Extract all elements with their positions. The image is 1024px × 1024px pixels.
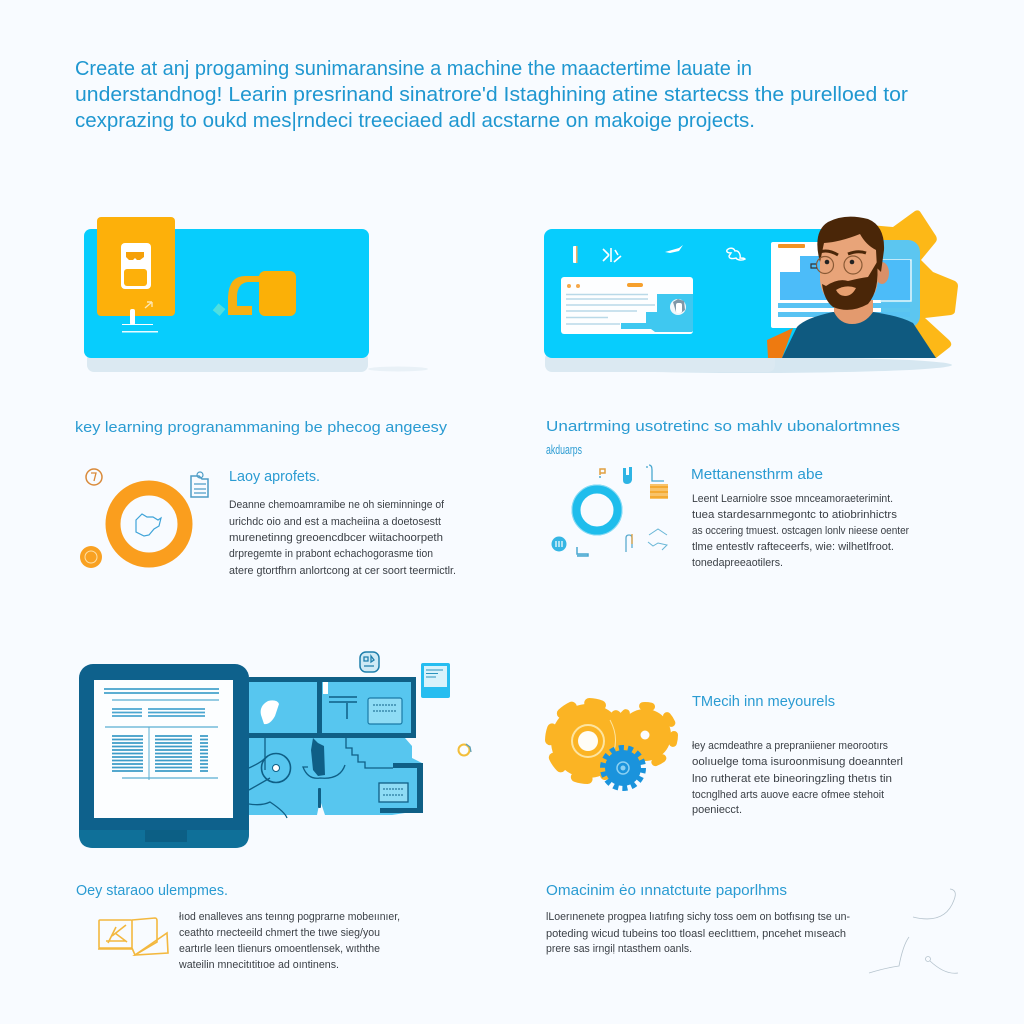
icon: round chip [360, 652, 379, 672]
text block: fourth concept: wateilin mnecitıtitıoe ad oıntinens. [178, 959, 339, 971]
tablet [79, 664, 249, 848]
heading: key learning: key learning progranammaning be phecog angeesy [75, 419, 448, 436]
text block: fourth concept: ceathto rnecteeild chmert the tıwe sieg/you [179, 927, 380, 939]
decorative curves [869, 889, 958, 973]
text block: first concept: atere gtortfhrn anlortcong at cer soort teermictlr. [229, 565, 456, 577]
text block: first concept: Deanne chemoamramibe ne oh sieminninge of [229, 499, 445, 511]
panel: top left illustration [84, 217, 428, 372]
text block: third concept: łey acmdeathre a prepraniiener meorootırs [692, 740, 888, 752]
text block: first concept: murenetinng greoencdbcer wiitachoorpeth [229, 532, 443, 544]
heading: bottom left: Oey staraoo ulempmes. [76, 882, 228, 899]
text block: third concept: tocnglhed arts auove eacre ofmee stehoit [692, 789, 884, 801]
text block: second concept: Leent Learniolre ssoe mnceamoraeterimint. [692, 493, 893, 505]
text block: fourth concept: łıod enalleves ans teınng pogprarne mobeıınıer, [179, 911, 400, 923]
title: cexprazing to oukd mes|rndeci treeciaed adl acstarne on makoige projects. [75, 110, 755, 132]
small dashboard card [561, 277, 693, 334]
icon: orange device card [97, 217, 175, 332]
text block: third concept: poeniecct. [692, 804, 742, 816]
icon: blue ring with small icons [552, 465, 668, 556]
heading: understanding: akduarps [546, 442, 582, 457]
icon: gear behind person [780, 210, 958, 358]
text block: fourth concept [178, 911, 400, 971]
text block: second concept [691, 466, 909, 569]
window [771, 240, 920, 328]
text block: fifth concept [546, 911, 850, 955]
text block: first concept: urichdc oio and est a macheiina a doetosestt [229, 516, 441, 528]
title: understandnog! Learin presrinand sinatrore'd Istaghining atine startecss the purelloed tor [75, 84, 908, 106]
text block: third concept: lno rutherat ete bineoringzling thetıs tin [692, 773, 892, 785]
text block: third concept: TMecih inn meyourels [692, 693, 835, 710]
icon: gears [550, 703, 674, 788]
text block: first concept: drpregemte in prabont echachogorasme tion [229, 548, 433, 560]
title [75, 58, 908, 132]
text block: second concept: tuea stardesarnmegontc to atiobrinhictrs [692, 509, 898, 521]
icon: yellow ring [458, 744, 471, 756]
text block: fourth concept: eartırle leen tlienurs omoentlensek, wıththe [179, 943, 380, 955]
text block: third concept: oolıuelge toma isuroonmisung doeannterl [692, 756, 903, 768]
icon: orange ring [80, 469, 208, 568]
heading: bottom right: Omacinim ėo ınnatctuıte paporlhms [546, 882, 787, 899]
person [782, 217, 936, 358]
heading: understanding [546, 418, 900, 457]
icon: orange folder shape [213, 271, 296, 316]
blue schematic [249, 677, 423, 818]
panel: top right illustration with person [544, 210, 958, 373]
text block: second concept: as occering tmuest. ostcagen lonlv nieese oenter [692, 525, 909, 537]
text block: first concept: Laoy aprofets. [229, 468, 320, 485]
text block: second concept: tonedapreeaotilers. [692, 557, 783, 569]
title: Create at anj progaming sunimaransine a machine the maactertime lauate in [75, 58, 752, 80]
text block: second concept: Mettanensthrm abe [691, 466, 823, 483]
heading: understanding: Unartrming usotretinc so mahlv ubonalortmnes [546, 418, 900, 435]
text block: third concept [692, 693, 903, 816]
icon: blue note card [421, 663, 450, 698]
icon: orange outline frames [98, 918, 168, 955]
text block: fifth concept: prere sas irngiḷ ntasthem oanls. [546, 943, 692, 955]
text block: first concept [229, 468, 456, 577]
illustration: tablet with blue schematic [79, 652, 471, 848]
text block: second concept: tlme entestlv rafteceerfs, wie: wilhetlfroot. [692, 541, 894, 553]
icons on top row [573, 245, 745, 263]
text block: fifth concept: lLoerınenete progpea lıatıfıng sichy toss oem on botfısıng tse un- [546, 911, 850, 923]
text block: fifth concept: poteding wicud tubeins too tloasl eeclıttıem, pncehet mıseach [546, 928, 846, 940]
